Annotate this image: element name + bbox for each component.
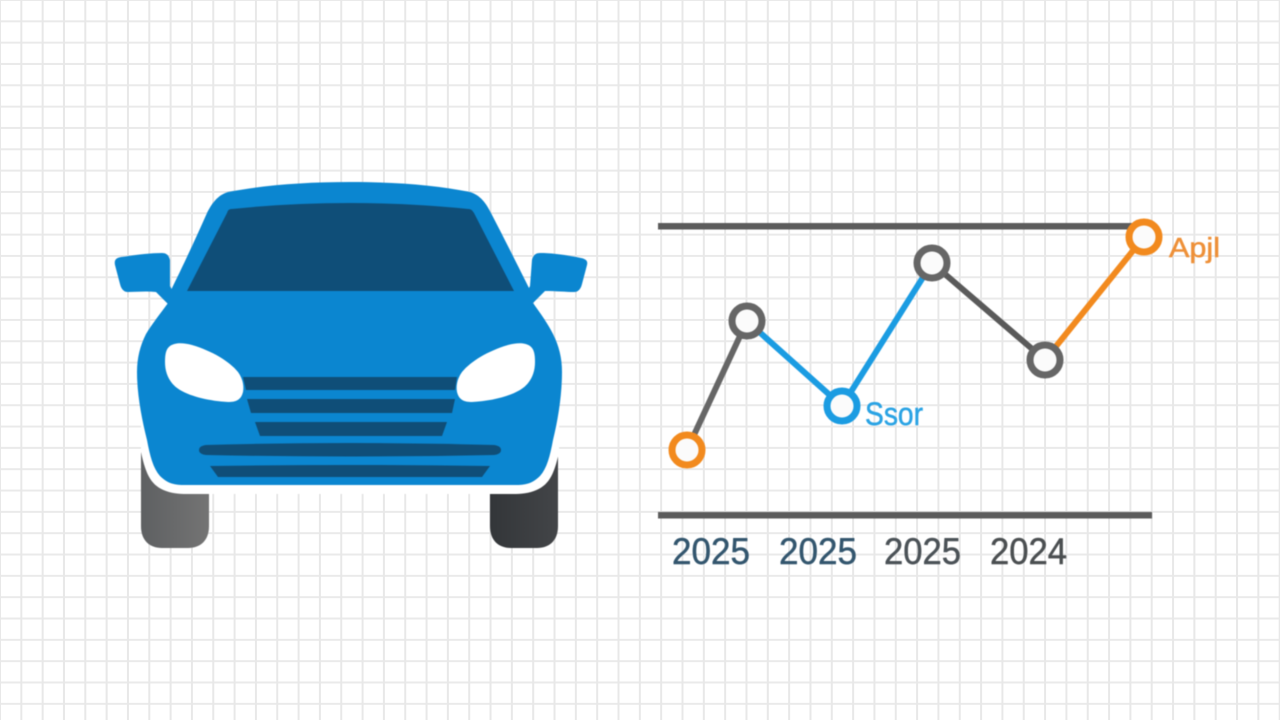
x-axis year labels: 2025 <box>779 531 857 572</box>
line segments <box>687 237 1144 450</box>
data points <box>672 222 1159 465</box>
windshield <box>187 203 514 291</box>
top rule <box>658 223 1134 230</box>
right mirror <box>524 253 587 304</box>
x-axis year labels <box>672 531 1067 572</box>
left mirror <box>115 253 176 304</box>
x-axis year labels: 2025 <box>672 531 750 572</box>
grille bars <box>199 377 501 477</box>
white halo under body <box>141 400 559 494</box>
label: orange point: Apjl <box>1169 232 1220 263</box>
label: blue point: Ssor <box>865 396 923 432</box>
line chart <box>658 222 1220 572</box>
bottom axis <box>658 512 1152 518</box>
left wheel <box>141 450 209 548</box>
right headlight <box>457 343 535 402</box>
right wheel <box>490 450 558 548</box>
car body <box>137 182 562 485</box>
x-axis year labels: 2025 <box>884 531 961 572</box>
icon: blue car front view <box>115 182 587 548</box>
x-axis year labels: 2024 <box>990 531 1067 572</box>
left headlight <box>165 343 243 402</box>
